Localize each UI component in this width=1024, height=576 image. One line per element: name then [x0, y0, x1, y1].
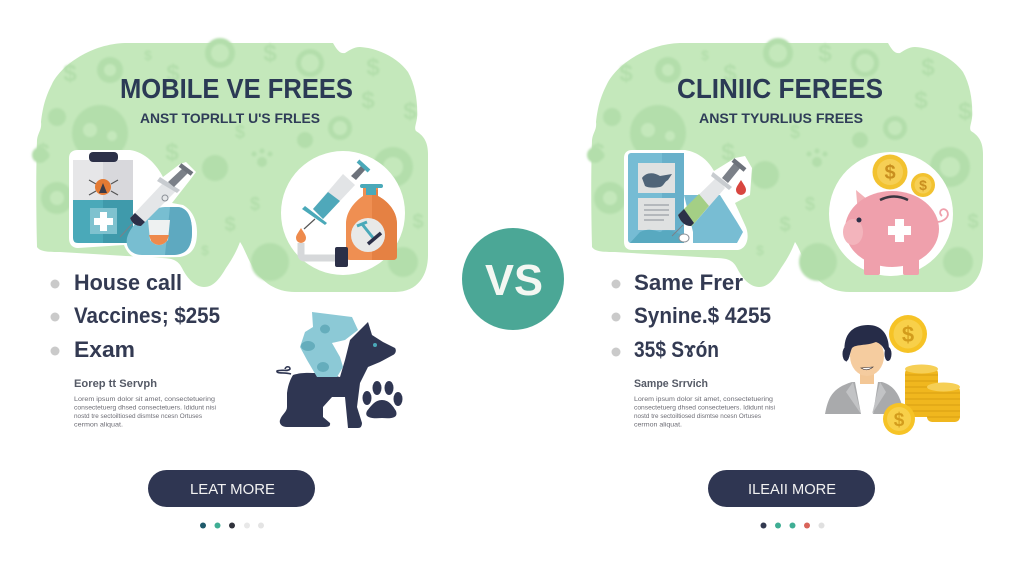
background pattern: coins, faces and dollars: $	[235, 122, 245, 142]
coin top: $	[902, 322, 914, 347]
icon: piggy bank with coins	[829, 152, 953, 276]
background pattern: coins, faces and dollars: $	[36, 139, 50, 166]
service note: clinic	[634, 378, 775, 428]
title: clinic: CLINIIC FEREES	[677, 73, 883, 104]
green blob background: clinic	[591, 43, 983, 292]
bullet list: mobile	[50, 270, 220, 362]
button: clinic: ILEAII MORE	[748, 482, 836, 498]
button: clinic	[708, 470, 875, 507]
bullet list: mobile: House call	[74, 270, 182, 295]
background pattern: coins, faces and dollars: $	[165, 139, 179, 166]
icon: syringe and orange bottle	[281, 151, 405, 275]
icon: clipboard, syringe and glass	[69, 150, 197, 258]
background pattern: coins, faces and dollars	[587, 38, 979, 281]
background pattern: coins, faces and dollars: $	[63, 60, 77, 87]
service note: clinic: nostd tre sectoiltiosed dismtse ncesn Ortuses	[634, 413, 762, 420]
coins above piggy: $	[884, 162, 896, 184]
syringe	[672, 160, 745, 242]
service note: clinic: Sampe Srrvich	[634, 378, 708, 390]
background pattern: coins, faces and dollars: $	[958, 98, 972, 125]
service note: clinic: Lorem ipsum dolor sit amet, consectetuering	[634, 396, 773, 403]
title: mobile: MOBILE VE FREES	[120, 73, 353, 104]
service note: clinic: consectetuerg dhsed consectetuers. Ididunt nisi	[634, 404, 775, 412]
icon: paw print	[362, 381, 402, 418]
background pattern: coins, faces and dollars: $	[412, 211, 424, 233]
coins above piggy: $	[919, 177, 927, 193]
background pattern: coins, faces and dollars: $	[723, 60, 737, 87]
tube and connector	[301, 243, 348, 267]
service note: mobile: Eorep tt Servph	[74, 378, 157, 390]
icon: record card and syringe	[624, 150, 752, 250]
icon: dog with blue cloth	[277, 312, 402, 428]
blood drop	[736, 180, 746, 195]
background pattern: coins, faces and dollars: $	[721, 139, 735, 166]
vs badge	[462, 228, 564, 330]
service note: mobile	[74, 378, 216, 428]
syringe	[120, 165, 192, 237]
background pattern: coins, faces and dollars: $	[403, 98, 417, 125]
background pattern: coins, faces and dollars: $	[805, 194, 815, 214]
button: mobile: LEAT MORE	[190, 482, 275, 498]
pagination dots: clinic	[760, 522, 824, 528]
green blob background: mobile	[36, 43, 428, 292]
background pattern: coins, faces and dollars: $	[201, 242, 209, 258]
background pattern: coins, faces and dollars: $	[779, 214, 791, 236]
bullet list: clinic: Synine.$ 4255	[634, 303, 771, 328]
service note: clinic: cermon aliquat.	[634, 422, 682, 428]
background pattern: coins, faces and dollars: $	[144, 47, 152, 63]
person	[825, 325, 904, 414]
background pattern: coins, faces and dollars: $	[591, 139, 605, 166]
record card	[628, 153, 684, 243]
background pattern: coins, faces and dollars: $	[701, 47, 709, 63]
subtitle: mobile: ANST TOPRLLT U'S FRLES	[140, 110, 320, 126]
bullet list: mobile: Vaccines; $255	[74, 303, 220, 328]
background pattern: coins, faces and dollars: $	[250, 194, 260, 214]
background pattern: coins, faces and dollars: $	[967, 211, 979, 233]
coin bottom: $	[894, 410, 905, 431]
vs badge: VS	[485, 256, 543, 305]
icon: person with coin stacks	[825, 315, 960, 435]
subtitle: clinic: ANST TYURLIUS FREES	[699, 110, 863, 126]
bullet list: clinic	[612, 270, 771, 362]
service note: mobile: cermon aliquat.	[74, 422, 123, 428]
service note: mobile: Lorem ipsum dolor sit amet, consectetuering	[74, 396, 215, 403]
background pattern: coins, faces and dollars: $	[166, 60, 180, 87]
background pattern: coins, faces and dollars: $	[921, 54, 935, 81]
syringe	[302, 161, 369, 229]
background pattern: coins, faces and dollars: $	[224, 214, 236, 236]
background pattern: coins, faces and dollars: $	[818, 40, 832, 67]
coins above piggy	[872, 154, 935, 197]
bottle	[346, 184, 397, 260]
background pattern: coins, faces and dollars: $	[914, 87, 928, 114]
blue triangle panel	[684, 195, 743, 243]
clipboard	[73, 152, 133, 243]
piggy	[843, 190, 948, 275]
bullet list: mobile: Exam	[74, 337, 135, 362]
background pattern: coins, faces and dollars: $	[263, 40, 277, 67]
background pattern: coins, faces and dollars: $	[619, 60, 633, 87]
jar with glass	[127, 207, 192, 255]
service note: mobile: nostd tre sectoiltiosed dismtse ncesn Ortuses	[74, 413, 203, 420]
panel: clinic fees	[587, 38, 983, 528]
button: mobile	[148, 470, 315, 507]
pagination dots: mobile	[200, 522, 264, 528]
bullet list: clinic: Same Frer	[634, 270, 743, 295]
background pattern: coins, faces and dollars: $	[361, 87, 375, 114]
coin stacks	[905, 364, 960, 422]
panel: mobile vet fees	[32, 38, 428, 528]
background pattern: coins, faces and dollars	[32, 38, 424, 281]
bullet list: clinic: 35$ Sɤón	[634, 337, 719, 362]
background pattern: coins, faces and dollars: $	[366, 54, 380, 81]
drop	[296, 228, 306, 243]
background pattern: coins, faces and dollars: $	[790, 122, 800, 142]
service note: mobile: consectetuerg dhsed consectetuers. Ididunt nisi	[74, 404, 216, 412]
background pattern: coins, faces and dollars: $	[756, 242, 764, 258]
